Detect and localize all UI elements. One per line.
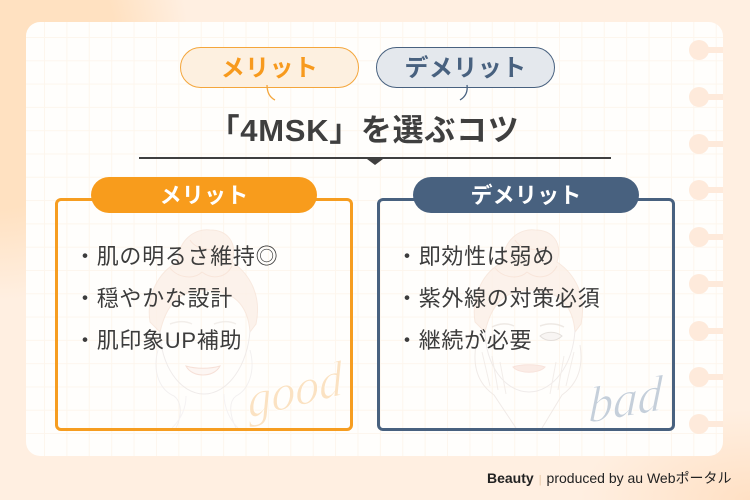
speech bubble: demerit: デメリット	[404, 55, 526, 82]
panel heading: merit	[91, 177, 317, 213]
panel heading: merit: メリット	[160, 183, 248, 208]
script word: good: good	[245, 350, 344, 429]
speech bubble: merit: メリット	[221, 55, 318, 82]
script word: bad: bad	[588, 364, 663, 434]
speech bubble: merit	[180, 47, 359, 88]
list: demerits: ・紫外線の対策必須	[396, 286, 600, 311]
illustration: smiling face	[148, 229, 258, 428]
list: merits	[74, 244, 278, 353]
panel: demerit	[377, 198, 675, 431]
list: demerits	[396, 244, 600, 353]
illustration: worried face	[474, 229, 583, 428]
panel heading: demerit: デメリット	[470, 183, 582, 208]
speech bubble: demerit	[376, 47, 555, 88]
list: merits: ・肌の明るさ維持◎	[74, 244, 278, 269]
panel: merit	[55, 198, 353, 431]
panel heading: demerit	[413, 177, 639, 213]
list: merits: ・穏やかな設計	[74, 286, 233, 311]
list: demerits: ・即効性は弱め	[396, 244, 555, 269]
title: 「4MSK」を選ぶコツ	[209, 113, 519, 148]
title rule with arrow	[139, 157, 611, 165]
footer credit: Beauty | produced by au Webポータル	[487, 470, 732, 486]
list: merits: ・肌印象UP補助	[74, 328, 242, 353]
bubble tails	[266, 84, 468, 101]
list: demerits: ・継続が必要	[396, 328, 532, 353]
